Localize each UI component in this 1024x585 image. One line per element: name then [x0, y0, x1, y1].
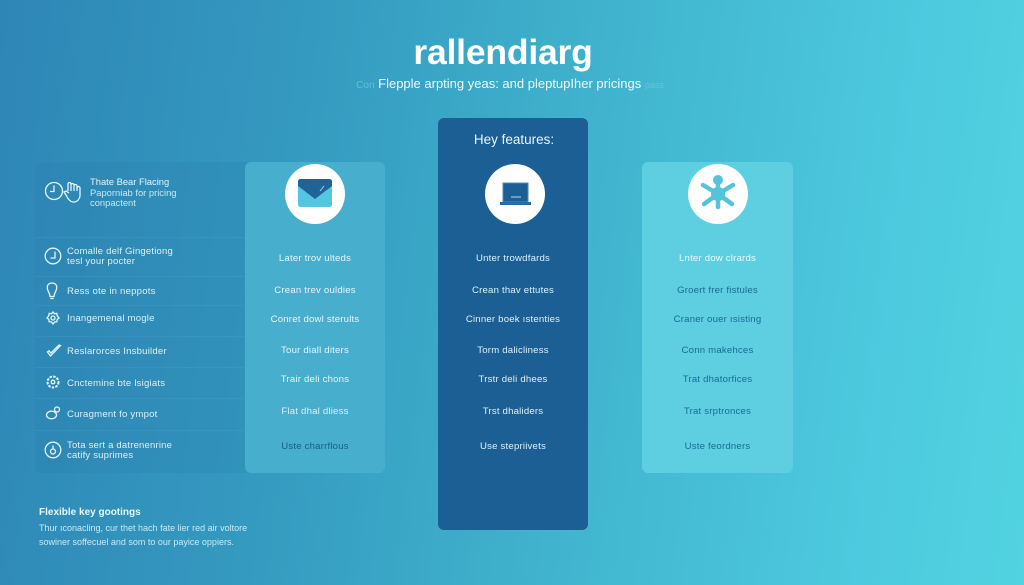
column 3 values: Trat dhatorfices	[683, 374, 752, 385]
column 1 icon: envelope	[285, 164, 345, 224]
icon: gear	[46, 311, 60, 325]
row label 2: Ress ote in neppots	[67, 286, 156, 297]
row label 1: Comalle delf Gingetiong	[67, 246, 173, 257]
column 3 icon: asterisk figure	[688, 164, 748, 224]
column 2 values: Crean thav ettutes	[472, 285, 554, 296]
column 2 values: Unter trowdfards	[476, 253, 550, 264]
left panel heading text: Paporniab for pricing	[90, 187, 177, 198]
icon: dial	[44, 248, 62, 264]
column 3 values: Uste feordners	[685, 441, 750, 452]
left panel heading text: conpactent	[90, 197, 136, 208]
icon: clock and hand	[44, 182, 81, 203]
column 3 values: Craner ouer ısisting	[674, 314, 761, 325]
panel: centre highlighted column	[438, 118, 588, 530]
column 3 values: Lnter dow clrards	[679, 253, 756, 264]
column 2 values	[466, 253, 560, 452]
column 1 values: Conret dowl sterults	[271, 314, 359, 325]
column 1 values: Trair deli chons	[281, 374, 349, 385]
row label 7: Tota sert a datrenenrine	[67, 440, 172, 451]
footer note: sowiner soffecuel and som to our payice oppiers.	[39, 537, 234, 547]
row label 1	[67, 246, 173, 267]
column 2 values: Use stepriivets	[480, 441, 546, 452]
column 1 values: Uste charrflous	[281, 441, 349, 452]
row label 6: Curagment fo ympot	[67, 409, 158, 420]
left panel heading text: Thate Bear Flacing	[90, 176, 169, 187]
left panel heading text	[90, 176, 177, 208]
column 1 values: Later trov ulteds	[279, 253, 351, 264]
column 2 values: Trst dhaliders	[483, 406, 543, 417]
icon: link	[46, 406, 60, 420]
icon: cog cluster	[46, 376, 60, 388]
footer note	[39, 507, 247, 547]
row label 5: Cnctemine bte lsigiats	[67, 378, 165, 389]
footer note: Flexible key gootings	[39, 507, 141, 518]
column 1 values: Crean trev ouldies	[274, 285, 356, 296]
title: rallendiarg	[413, 32, 593, 72]
column 2 values: Trstr deli dhees	[479, 374, 547, 385]
column 1 values: Tour diall diters	[281, 345, 349, 356]
column 3 values: Groert frer fistules	[677, 285, 758, 296]
row label 3: Inangemenal mogle	[67, 313, 155, 324]
row label 1: tesl your pocter	[67, 256, 135, 267]
row label 7: catify suprimes	[67, 450, 133, 461]
column 3 values	[674, 253, 761, 452]
panel: left feature list	[35, 162, 385, 473]
icon: check pencil	[46, 344, 62, 357]
row label 4: Reslarorces Insbuilder	[67, 346, 167, 357]
centre column heading: Hey features:	[474, 132, 554, 147]
panel: third plan column	[642, 162, 793, 473]
column 2 icon: laptop	[485, 164, 545, 224]
column 1 values	[271, 253, 359, 452]
column 1 values: Flat dhal dliess	[281, 406, 349, 417]
column 3 values: Conn makehces	[682, 345, 753, 356]
column 3 values: Trat srptronces	[684, 406, 751, 417]
panel: first plan column	[245, 162, 385, 473]
column 2 values: Torm dalicliness	[477, 345, 549, 356]
column 2 values: Cinner boek ıstenties	[466, 314, 560, 325]
icon: number badge	[44, 442, 62, 458]
row label 7	[67, 440, 172, 461]
footer note: Thur ıconacling, cur thet hach fate lier red air voltore	[39, 523, 247, 533]
subtitle: Con Flepple arpting yeas: and pleptupIher pricings pass	[356, 76, 664, 91]
icon: bulb	[46, 282, 58, 300]
